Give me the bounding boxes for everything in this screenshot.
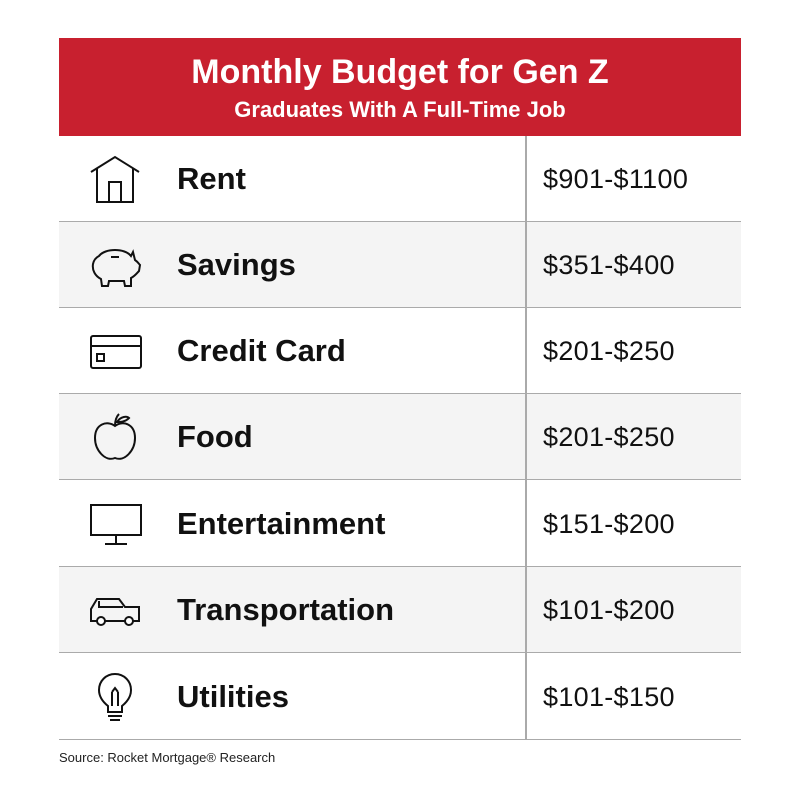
icon: piggy bank: [92, 249, 142, 287]
icon: light bulb: [98, 673, 132, 721]
value: $101-$200: [543, 595, 675, 625]
icon: house: [90, 156, 140, 203]
header: [59, 38, 741, 136]
row: food: [59, 394, 741, 480]
label: Rent: [177, 161, 246, 196]
source note: Source: Rocket Mortgage® Research: [59, 750, 275, 765]
value: $101-$150: [543, 682, 675, 712]
label: Transportation: [177, 592, 394, 627]
label: Credit Card: [177, 333, 346, 368]
row: credit card: [59, 308, 741, 394]
row: entertainment: [59, 481, 741, 567]
title: Monthly Budget for Gen Z: [191, 53, 609, 91]
value: $901-$1100: [543, 164, 688, 194]
icon: car: [90, 598, 140, 626]
subtitle: Graduates With A Full-Time Job: [234, 97, 566, 122]
row: rent: [59, 136, 741, 222]
row: utilities: [59, 654, 741, 740]
value: $201-$250: [543, 422, 675, 452]
row: transportation: [59, 567, 741, 653]
label: Food: [177, 419, 253, 454]
value: $351-$400: [543, 250, 675, 280]
icon: credit card: [90, 335, 142, 369]
icon: monitor: [90, 504, 142, 545]
value: $201-$250: [543, 336, 675, 366]
label: Entertainment: [177, 506, 385, 541]
label: Savings: [177, 247, 296, 282]
row: savings: [59, 222, 741, 308]
label: Utilities: [177, 679, 289, 714]
value: $151-$200: [543, 509, 675, 539]
icon: apple: [94, 413, 136, 460]
